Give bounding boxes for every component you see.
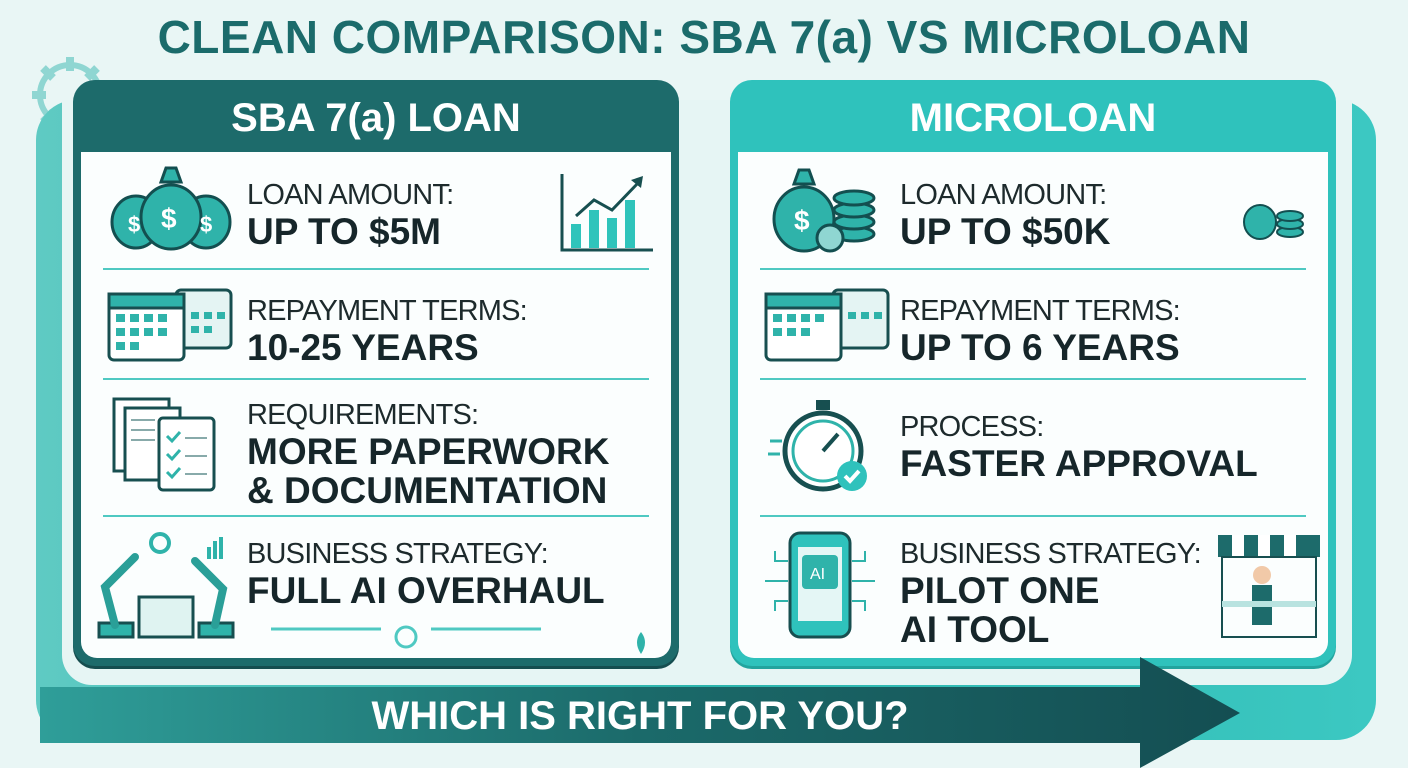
text: business strategy: PILOT ONE xyxy=(900,570,1099,611)
icon: robot arms factory xyxy=(98,532,234,638)
text: business strategy: BUSINESS STRATEGY: xyxy=(900,538,1201,570)
icon: stopwatch xyxy=(768,400,867,492)
text: repayment terms xyxy=(900,295,1180,368)
icon: calendars xyxy=(108,288,232,362)
text: loan amount: LOAN AMOUNT: xyxy=(247,179,453,211)
text: process xyxy=(900,411,1258,484)
row: business strategy xyxy=(765,532,1320,650)
row: loan amount xyxy=(772,168,1304,252)
icon: phone with AI: AI xyxy=(810,566,825,583)
row: repayment terms xyxy=(108,288,527,368)
arrow: which is right for you: WHICH IS RIGHT FOR YOU? xyxy=(371,694,909,738)
text: requirements: & DOCUMENTATION xyxy=(247,470,607,511)
decoration line xyxy=(271,626,645,654)
row: loan amount xyxy=(110,166,653,252)
text: business strategy xyxy=(247,538,605,611)
heading: MICROLOAN: MICROLOAN xyxy=(910,96,1156,140)
row: process xyxy=(768,400,1258,492)
text: process: PROCESS: xyxy=(900,411,1043,443)
title: CLEAN COMPARISON: SBA 7(a) VS MICROLOAN xyxy=(158,11,1250,63)
panel: SBA 7(a) loan xyxy=(73,80,679,666)
row: requirements xyxy=(112,398,609,511)
text: loan amount: UP TO $5M xyxy=(247,211,441,252)
row: business strategy xyxy=(98,532,645,654)
icon: calendars xyxy=(764,288,890,362)
icon: money bags xyxy=(110,166,232,250)
text: repayment terms: UP TO 6 YEARS xyxy=(900,327,1180,368)
icon: phone with AI xyxy=(765,532,875,638)
icon: money bags: $ xyxy=(200,212,212,237)
text: requirements: MORE PAPERWORK xyxy=(247,431,609,472)
text: business strategy: AI TOOL xyxy=(900,609,1049,650)
icon: shop stall xyxy=(1218,535,1320,638)
icon: growth chart xyxy=(560,174,653,252)
row: repayment terms xyxy=(764,288,1180,368)
outer frame xyxy=(36,100,1376,740)
icon: money bag and coins: $ xyxy=(794,205,810,236)
panel: Microloan xyxy=(730,80,1336,666)
text: requirements xyxy=(247,399,609,511)
text: repayment terms: REPAYMENT TERMS: xyxy=(900,295,1180,327)
arrow: which is right for you xyxy=(40,657,1240,768)
text: business strategy: BUSINESS STRATEGY: xyxy=(247,538,548,570)
icon: money bag and coins xyxy=(772,168,876,252)
text: loan amount: UP TO $50K xyxy=(900,211,1110,252)
icon: money bags: $ xyxy=(128,212,140,237)
text: loan amount xyxy=(247,179,453,252)
icon: small money bag xyxy=(1243,204,1304,240)
icon: documents xyxy=(112,398,216,492)
text: repayment terms: 10-25 YEARS xyxy=(247,327,479,368)
background gears xyxy=(32,57,100,120)
text: loan amount: LOAN AMOUNT: xyxy=(900,179,1106,211)
text: business strategy: FULL AI OVERHAUL xyxy=(247,570,605,611)
text: business strategy xyxy=(900,538,1201,650)
text: process: FASTER APPROVAL xyxy=(900,443,1258,484)
text: repayment terms: REPAYMENT TERMS: xyxy=(247,295,527,327)
text: loan amount xyxy=(900,179,1110,252)
heading: SBA 7(a) LOAN: SBA 7(a) LOAN xyxy=(231,96,521,140)
icon: money bags: $ xyxy=(161,203,177,234)
text: repayment terms xyxy=(247,295,527,368)
text: requirements: REQUIREMENTS: xyxy=(247,399,478,431)
